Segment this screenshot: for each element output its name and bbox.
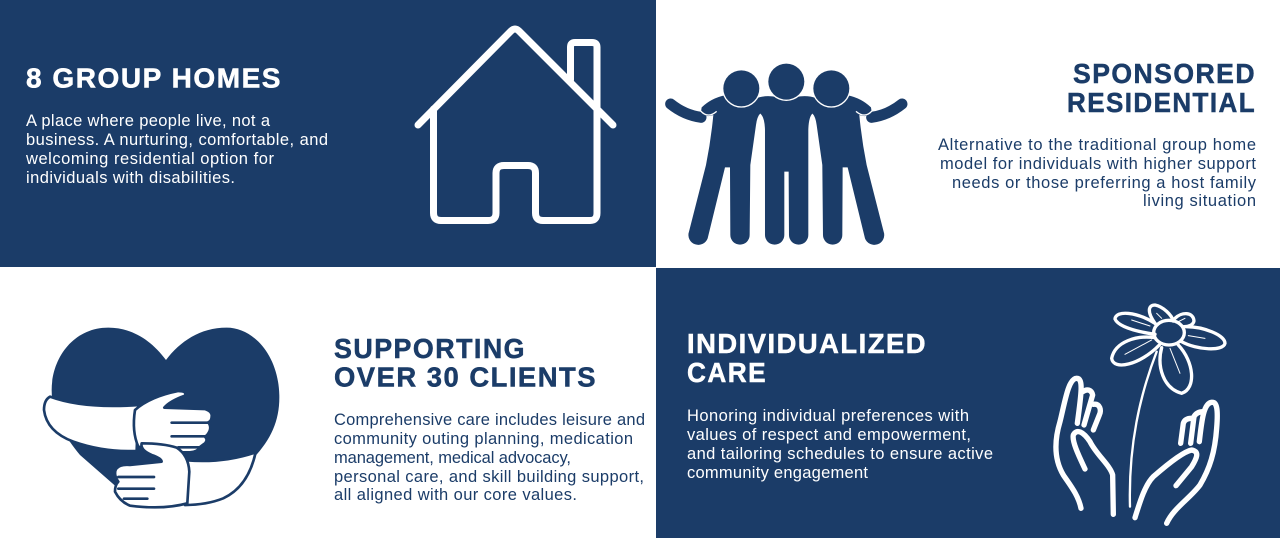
body text: group homes: individuals with disabilities. [26,169,235,187]
body text: supporting clients: all aligned with our core values. [334,486,577,504]
panel: sponsored residential [656,0,1280,268]
body text: supporting clients: personal care, and skill building support, [334,468,644,486]
icon: hands holding a flower [1056,305,1225,523]
body text: sponsored residential: model for individuals with higher support [940,155,1256,173]
heading: individualized care: INDIVIDUALIZED [687,328,927,359]
body text: supporting clients: community outing planning, medication [334,430,633,448]
heading: individualized care: CARE [687,357,767,388]
body text: individualized care: values of respect and empowerment, [687,426,971,444]
icon: house [418,29,613,220]
heading: sponsored residential: RESIDENTIAL [1067,87,1256,118]
body text: group homes: A place where people live, not a [26,112,271,130]
body text: individualized care: Honoring individual preferences with [687,407,969,425]
heading: individualized care [687,328,927,388]
heading: 8 group homes: 8 GROUP HOMES [26,62,282,94]
heading: supporting over 30 clients: OVER 30 CLIENTS [334,362,597,392]
heading: supporting over 30 clients: SUPPORTING [334,333,526,364]
body text: sponsored residential: needs or those preferring a host family [952,174,1257,192]
body text: group homes [25,112,328,187]
body text: sponsored residential: Alternative to the traditional group home [938,136,1256,154]
body text: group homes: business. A nurturing, comfortable, and [26,131,328,149]
body text: individualized care: community engagement [687,464,868,482]
body text: supporting clients: Comprehensive care includes leisure and [334,411,645,429]
panel: supporting over 30 clients [0,267,656,538]
panel: 8 group homes [0,0,656,267]
heading: sponsored residential: SPONSORED [1073,58,1256,89]
body text: individualized care: and tailoring schedules to ensure active [687,445,993,463]
heading: sponsored residential [1067,58,1256,118]
body text: supporting clients [334,411,645,504]
body text: sponsored residential [938,136,1257,210]
panel: individualized care [656,268,1280,538]
body text: sponsored residential: living situation [1143,192,1256,210]
body text: individualized care [687,407,993,482]
heading: supporting over 30 clients [334,333,597,392]
body text: supporting clients: management, medical advocacy, [334,449,571,467]
body text: group homes: welcoming residential option for [25,150,274,168]
icon: arms hugging a heart [44,328,279,507]
icon: three people embracing [671,62,902,245]
